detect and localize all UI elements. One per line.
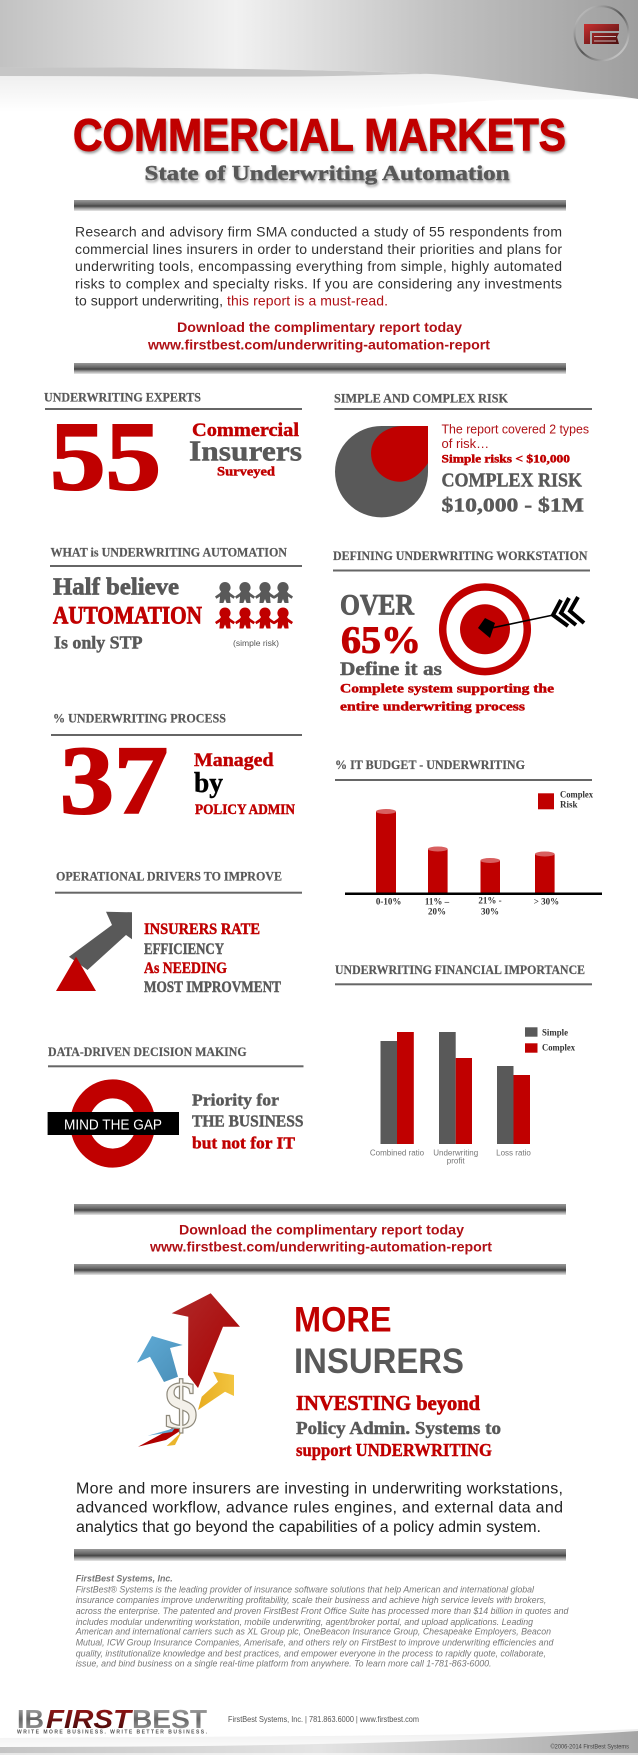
download call to action: www.firstbest.com/underwriting-automation-report (149, 1238, 492, 1254)
icon: mind the gap roundel: MIND THE GAP (64, 1117, 162, 1133)
managed by policy admin: Managed (194, 750, 274, 771)
grouped bar chart: Loss ratio (496, 1148, 531, 1157)
managed by policy admin (194, 750, 295, 818)
commercial insurers surveyed (189, 420, 302, 479)
divider (74, 200, 566, 211)
icon: people grid (215, 582, 293, 628)
automation statement: Half believe (53, 574, 179, 600)
legend (525, 1027, 575, 1053)
company boilerplate: across the enterprise. The patented and proven FirstBest Front Office Suite has processed more than $14 billion in quotes and (76, 1606, 569, 1616)
more insurers heading (294, 1300, 464, 1381)
panel: defining underwriting workstation (333, 549, 590, 714)
footer logo: IB (17, 1704, 44, 1734)
workstation stat text: OVER (340, 588, 414, 621)
heading: % UNDERWRITING PROCESS (53, 712, 226, 726)
download call to action: Download the complimentary report today (177, 319, 462, 335)
divider (74, 1549, 566, 1561)
legend: Complex (542, 1043, 575, 1053)
intro paragraph: risks to complex and specialty risks. If you are considering any investments (75, 275, 562, 291)
panel: underwriting process (51, 712, 302, 834)
legend (538, 790, 593, 810)
workstation stat text (340, 588, 554, 714)
priority text: Priority for (192, 1091, 279, 1110)
investing text: support UNDERWRITING (296, 1440, 492, 1460)
divider (74, 1264, 566, 1275)
note: (simple risk) (233, 639, 279, 648)
company boilerplate: includes modular underwriting workstation, mobile underwriting, agent/broker portal, and upload applications. Leading (76, 1617, 533, 1627)
closing paragraph (76, 1480, 563, 1536)
download call to action: www.firstbest.com/underwriting-automation-report (147, 336, 490, 352)
bar chart (345, 809, 602, 916)
grouped bar chart: profit (447, 1157, 465, 1166)
heading: % IT BUDGET - UNDERWRITING (335, 758, 525, 772)
company boilerplate: Mutual, ICW Group Insurance Companies, Amerisafe, and others rely on FirstBest to improve underwriting efficiencies and (76, 1638, 554, 1648)
icon: target with arrow (443, 587, 584, 672)
big number 55: 55 (50, 403, 161, 510)
company boilerplate: insurance companies improve underwriting profitability, scale their business and achieve high service levels with brokers, (76, 1595, 546, 1605)
legend: Complex (560, 790, 593, 800)
workstation stat text: Complete system supporting the (340, 681, 554, 696)
icon: arrow and triangle (56, 912, 132, 991)
intro paragraph: Research and advisory firm SMA conducted a study of 55 respondents from (75, 224, 562, 240)
footer contact: FirstBest Systems, Inc. | 781.863.6000 | www.firstbest.com (228, 1714, 419, 1724)
commercial insurers surveyed: Surveyed (217, 464, 276, 479)
risk text: COMPLEX RISK (442, 470, 582, 492)
bar chart: 20% (428, 906, 446, 916)
panel: it budget (335, 758, 602, 916)
company boilerplate: FirstBest® Systems is the leading provider of insurance software solutions that help American and international global (76, 1584, 535, 1594)
intro paragraph: this report is a must-read. (227, 292, 388, 308)
legend: Simple (542, 1028, 568, 1038)
bar chart: 11% – (425, 896, 450, 906)
closing paragraph: advanced workflow, advance rules engines, and external data and (76, 1500, 563, 1517)
intro paragraph (75, 224, 562, 308)
heading: UNDERWRITING EXPERTS (44, 391, 201, 405)
intro paragraph: to support underwriting, (75, 292, 223, 308)
risk text (442, 421, 589, 517)
drivers text (144, 921, 281, 996)
investing text (296, 1391, 501, 1460)
grouped bar chart (370, 1032, 531, 1166)
bar chart: 21% - (478, 895, 502, 905)
investing text: Policy Admin. Systems to (296, 1418, 501, 1438)
priority text: but not for IT (192, 1134, 296, 1153)
footer band (0, 1729, 638, 1755)
workstation stat text: 65% (341, 619, 421, 661)
title: COMMERCIAL MARKETS (73, 110, 566, 160)
heading: OPERATIONAL DRIVERS TO IMPROVE (56, 870, 282, 884)
heading: DATA-DRIVEN DECISION MAKING (48, 1045, 247, 1059)
download call to action: Download the complimentary report today (179, 1221, 464, 1237)
bar chart: 0-10% (376, 896, 401, 906)
panel: what is underwriting automation (50, 546, 302, 652)
panel: underwriting financial importance (335, 963, 592, 1166)
intro paragraph: underwriting tools, encompassing everything from simple, highly automated (75, 258, 562, 274)
company boilerplate (75, 1574, 569, 1669)
icon: rising arrows with dollar sign: $ (164, 1367, 198, 1443)
drivers text: INSURERS RATE (144, 921, 260, 938)
divider (74, 363, 566, 374)
priority text: THE BUSINESS (192, 1112, 304, 1131)
header banner (0, 0, 638, 112)
panel: simple and complex risk (334, 392, 592, 517)
risk text: Simple risks < $10,000 (442, 453, 570, 466)
company boilerplate: issue, and bind business on a single real-time platform from anywhere. To learn more call 1-781-863-6000. (76, 1659, 491, 1669)
pie chart (335, 426, 428, 517)
heading: SIMPLE AND COMPLEX RISK (334, 392, 508, 406)
priority text (192, 1091, 304, 1153)
heading: WHAT is UNDERWRITING AUTOMATION (50, 546, 287, 560)
copyright: ©2006-2014 FirstBest Systems (550, 1742, 630, 1750)
grouped bar chart: Underwriting (433, 1148, 478, 1157)
heading: UNDERWRITING FINANCIAL IMPORTANCE (335, 963, 585, 977)
risk text: $10,000 - $1M (442, 495, 584, 517)
commercial insurers surveyed: Insurers (189, 436, 302, 468)
logo badge (574, 6, 628, 60)
automation statement (53, 574, 202, 652)
investing text: INVESTING beyond (296, 1391, 480, 1415)
grouped bar chart: Combined ratio (370, 1148, 425, 1157)
closing paragraph: More and more insurers are investing in underwriting workstations, (76, 1480, 563, 1498)
bar chart: 30% (481, 906, 499, 916)
more insurers heading: INSURERS (294, 1342, 464, 1381)
managed by policy admin: POLICY ADMIN (195, 802, 295, 818)
footer logo (17, 1704, 208, 1736)
footer logo: WRITE MORE BUSINESS. WRITE BETTER BUSINESS. (17, 1730, 208, 1736)
company boilerplate: quality, institutionalize knowledge and best practices, and empower everyone in the process to rapidly quote, collaborate, (76, 1649, 546, 1659)
bar chart: > 30% (534, 896, 559, 906)
managed by policy admin: by (194, 767, 223, 799)
risk text: The report covered 2 types (442, 421, 589, 436)
drivers text: As NEEDING (144, 960, 227, 977)
footer logo: FIRST (46, 1704, 133, 1734)
legend: Risk (560, 800, 578, 810)
drivers text: EFFICIENCY (144, 941, 224, 958)
automation statement: Is only STP (54, 632, 143, 652)
download call to action (147, 319, 490, 352)
intro paragraph: commercial lines insurers in order to understand their priorities and plans for (75, 241, 562, 257)
footer logo: BEST (132, 1704, 207, 1734)
big number 37: 37 (60, 727, 168, 834)
panel: data-driven decision making (48, 1045, 303, 1158)
automation statement: AUTOMATION (53, 602, 202, 629)
more insurers heading: MORE (294, 1300, 392, 1340)
download call to action (149, 1221, 492, 1254)
subtitle: State of Underwriting Automation (144, 161, 510, 185)
company boilerplate: American and international carriers such as XL Group plc, OneBeacon Insurance Group, Chesapeake Employers, Beacon (75, 1627, 551, 1637)
risk text: of risk… (442, 436, 489, 451)
panel: operational drivers (55, 870, 302, 996)
workstation stat text: entire underwriting process (340, 699, 525, 714)
icon: rising arrows with dollar sign (137, 1293, 240, 1447)
icon: mind the gap roundel (48, 1089, 179, 1158)
workstation stat text: Define it as (340, 659, 442, 680)
heading: DEFINING UNDERWRITING WORKSTATION (333, 549, 588, 563)
commercial insurers surveyed: Commercial (192, 420, 299, 441)
divider (74, 1204, 566, 1215)
drivers text: MOST IMPROVMENT (144, 979, 281, 996)
closing paragraph: analytics that go beyond the capabilities of a policy admin system. (76, 1519, 541, 1536)
panel: underwriting experts (44, 391, 302, 510)
company boilerplate: FirstBest Systems, Inc. (76, 1574, 173, 1584)
